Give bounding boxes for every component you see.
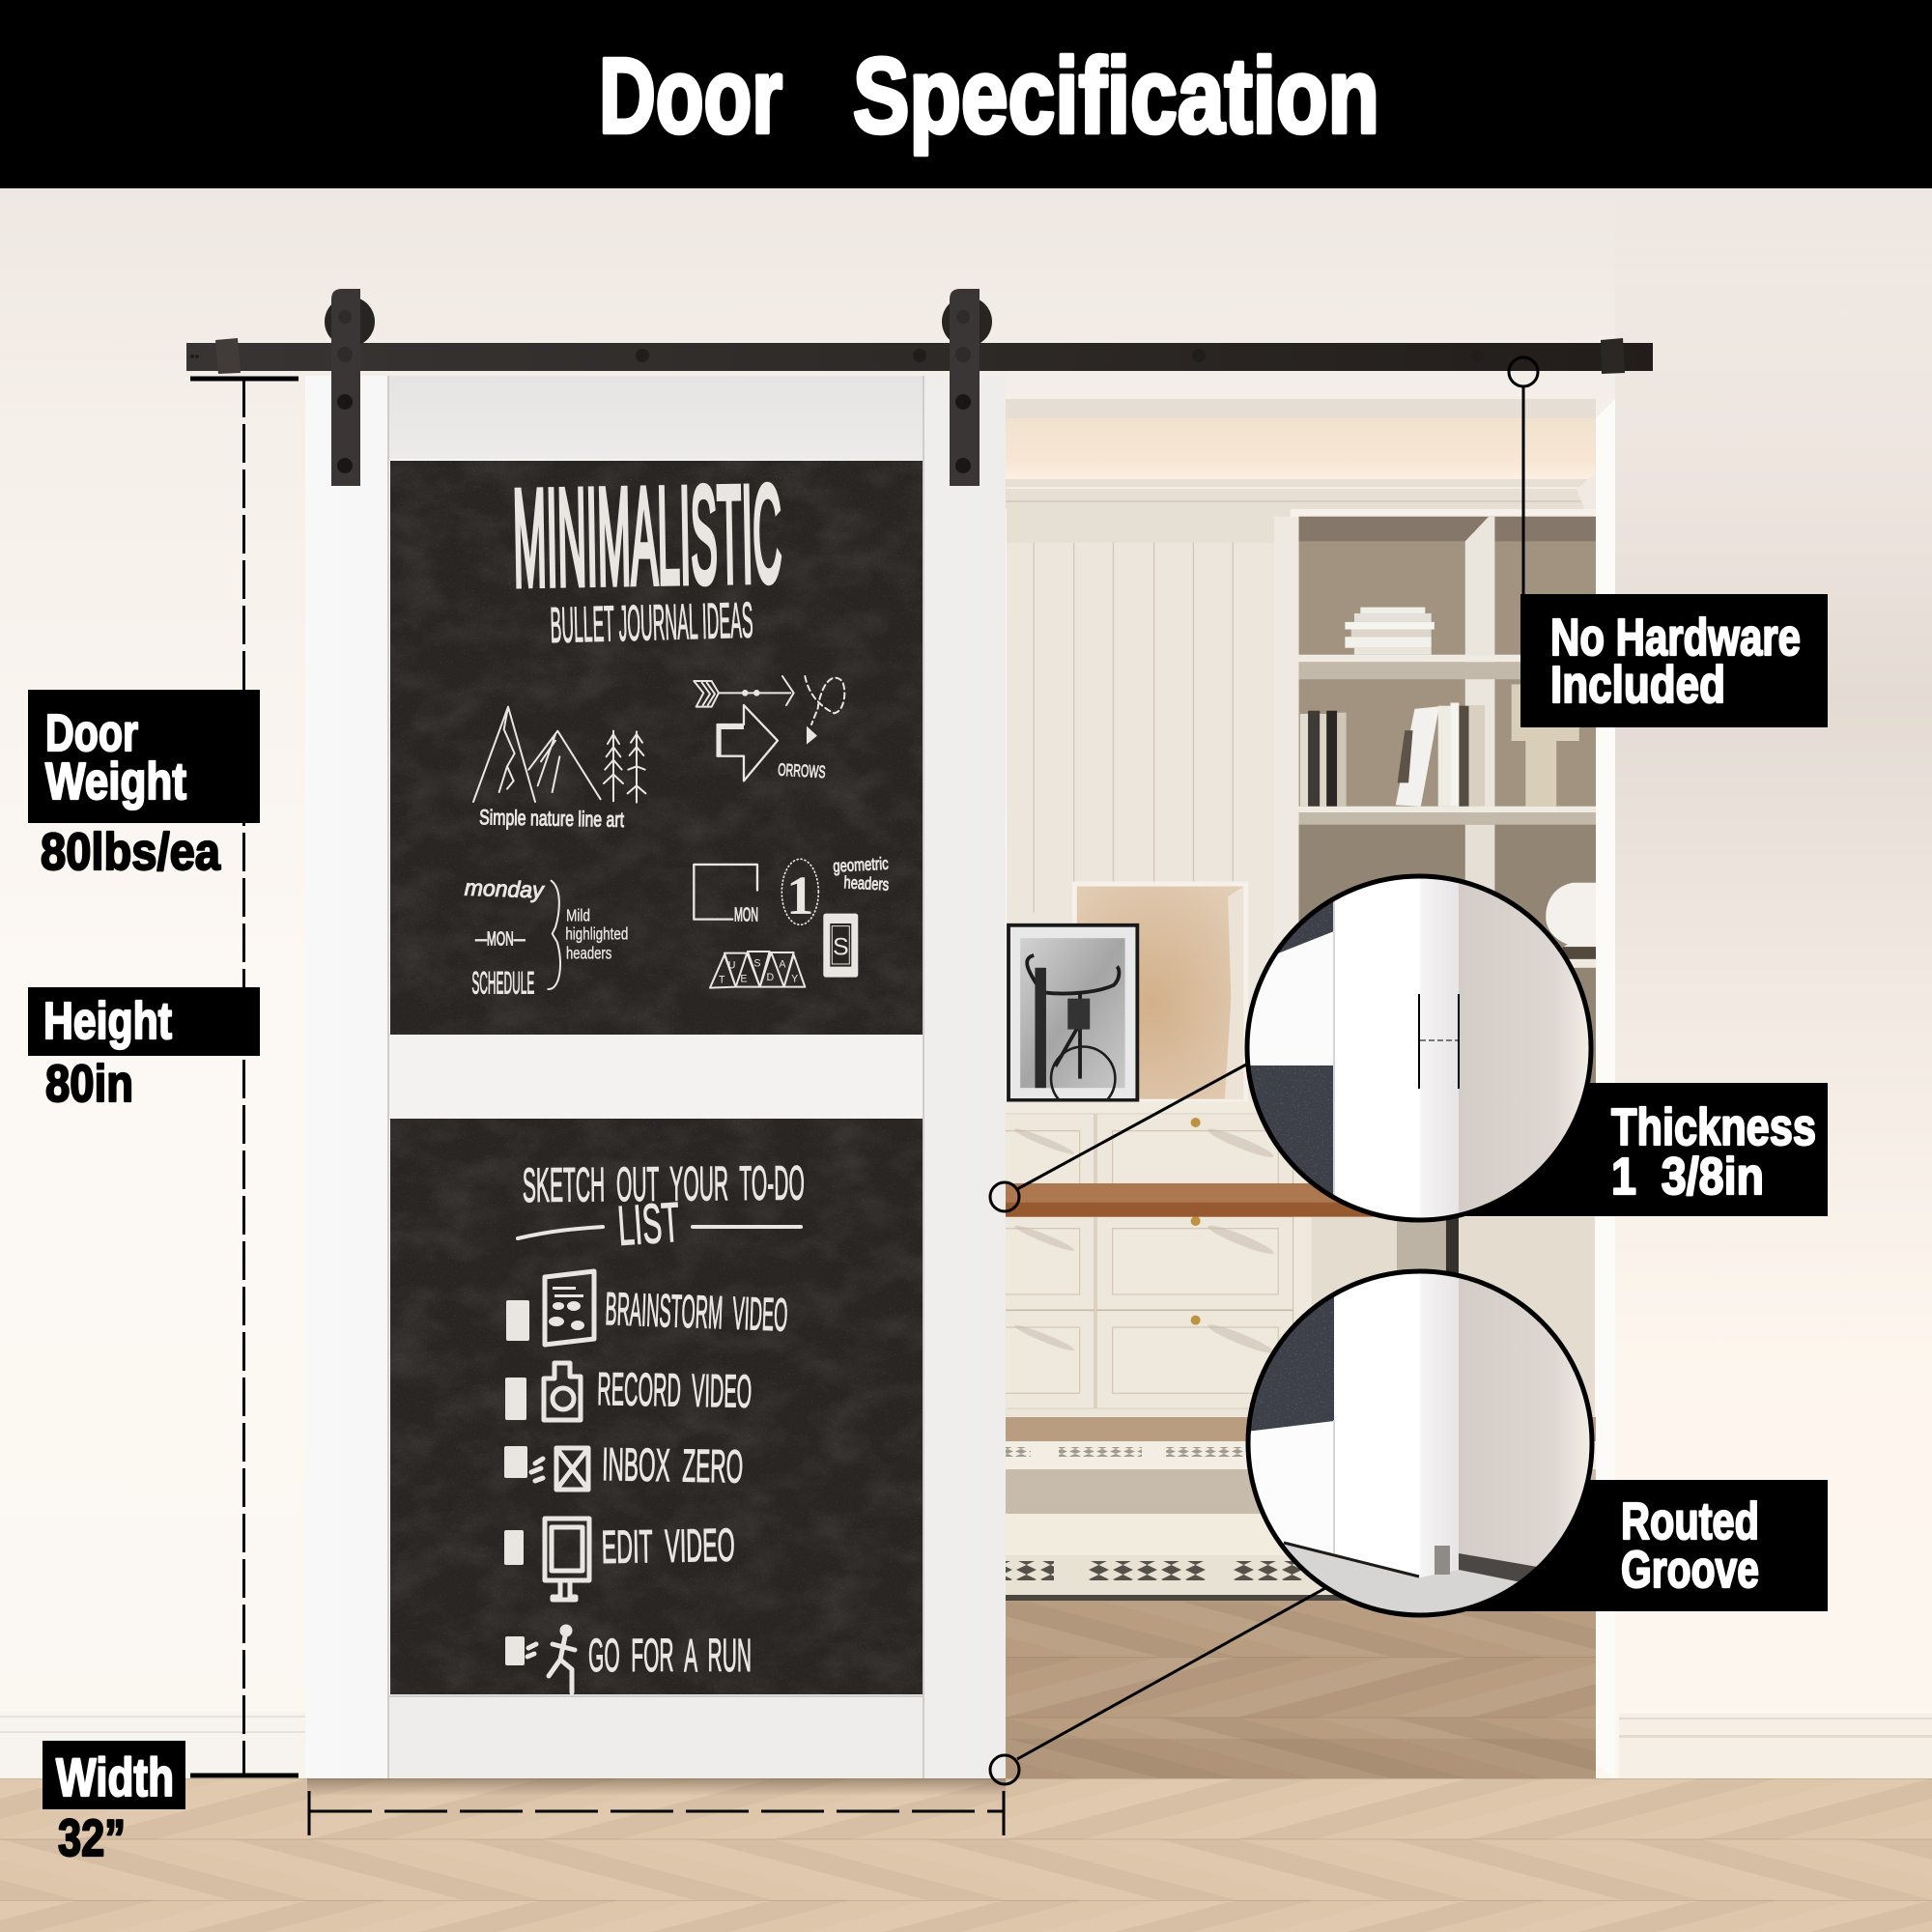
value: width: 32” [58,1809,126,1867]
door frame [305,376,1006,1778]
sketch: block arrow [717,705,778,781]
sketch: brace [548,881,560,989]
framed artwork [1007,881,1248,1111]
bookshelf [1274,517,1600,1133]
chalk note: mon: —MON— [475,927,526,950]
chalk note: mild headers: headers [566,944,611,963]
chalk heading: list: LIST [615,1191,682,1258]
height dimension line [190,379,298,1776]
to-do item: record video [505,1363,753,1420]
to-do item: brainstorm video [506,1271,788,1345]
sketch: arrow tip [807,726,817,745]
label: door weight: Door [45,704,138,762]
label: routed groove: Routed [1621,1492,1759,1550]
sketch: dashed arrow [805,676,844,724]
rail bolts [636,349,1485,362]
barn door: BULLET JOURNAL IDEAS [550,593,753,654]
to-do item: inbox zero [504,1439,744,1493]
label: no hardware included [1520,594,1828,727]
barn door: SKETCH OUT YOUR TO-DO [523,1155,805,1212]
detail circle: routed groove [1246,1269,1594,1623]
thickness marker [1419,994,1459,1089]
barn door: EDIT VIDEO [601,1520,735,1574]
chalk note: nature line art: Simple nature line art [479,805,624,832]
chalk note: geometric headers: headers [843,872,890,895]
right hanger [942,289,992,486]
sketch: tuesday bunting: Y [791,974,798,985]
width dimension line [309,1791,1004,1835]
sketch: box with mon [694,865,757,920]
right stop [1601,338,1625,374]
value: height: 80in [45,1055,133,1113]
title [599,37,1379,156]
label: thickness: 1 3/8in [1611,1148,1764,1206]
groove notch [1435,1546,1450,1575]
title: Specification [853,37,1379,156]
door jamb [1596,399,1615,1778]
value: door weight: 80lbs/ea [41,823,221,881]
vase [1546,883,1600,968]
chalk note: mild headers: Mild [566,905,590,924]
sketch: tuesday bunting: D [766,972,774,983]
chalkboard lower [389,1119,923,1695]
cabinets [1005,1102,1595,1546]
chalk sketches upper: SCHEDULE [471,964,534,1000]
label: no hardware included: No Hardware [1550,609,1801,667]
room seen through the doorway [1005,399,1600,1778]
sculpture [1512,684,1579,807]
sketch: tuesday bunting: T [719,974,725,985]
books: upright right [1396,702,1485,807]
label box: routed groove background [1459,1480,1828,1611]
room panel wall [1007,508,1291,1124]
sketch: tuesday bunting: A [779,959,786,971]
label: routed groove [1621,1492,1759,1599]
label: routed groove: Groove [1621,1541,1759,1599]
label box: thickness background [1459,1083,1828,1216]
label: door weight [28,690,260,823]
barn door: INBOX ZERO [602,1439,744,1493]
bicycle photo [1027,955,1119,1111]
barn door: MINIMALISTIC [512,457,782,615]
left stop [190,338,241,374]
callout connector: routed groove [990,1588,1325,1784]
callout connector: thickness [990,1065,1246,1211]
chalk note: mild headers: highlighted [565,924,628,944]
chalk note: mild headers [565,905,628,963]
room floor and rug [1006,1417,1596,1778]
chalk note: mon box: MON [734,903,758,925]
detail circle: thickness [1246,874,1594,1222]
left hanger [325,289,375,486]
chalk note: monday: monday [464,875,545,903]
label: height [28,987,260,1056]
sketch: numeral one [781,859,818,926]
barn door: BRAINSTORM VIDEO [605,1284,788,1342]
label: height: Height [43,992,172,1050]
to-do item: edit video [504,1519,735,1600]
sketch: arrow [694,676,794,707]
room upper wall and cove [1006,399,1596,509]
books: upright left [1300,711,1347,807]
sketch: tuesday bunting: U [728,960,735,972]
chalkboard upper [389,459,923,1036]
label: no hardware included: Included [1550,656,1725,714]
chalk sketches upper [464,676,890,1000]
chalk note: geometric headers [833,854,890,895]
barn door: GO FOR A RUN [588,1631,752,1682]
to-do item: go for a run [505,1627,752,1692]
rail [186,343,1653,371]
sketch: tuesday bunting: E [740,974,748,985]
brass knobs [1191,1118,1201,1325]
barn door hardware [186,289,1653,486]
label: width: Width [56,1747,174,1807]
books: stacked [1345,608,1435,655]
sketch: tuesday bunting [710,952,805,988]
sketch: s tile [823,914,858,978]
label: thickness: Thickness [1611,1098,1816,1156]
chalk note: arrows: ORROWS [778,760,826,781]
title bar [0,0,1932,188]
title: Door [599,37,782,156]
baseboards [0,1712,1932,1778]
barn door: RECORD VIDEO [597,1364,753,1418]
barn door [305,376,1006,1778]
chalk note: geometric headers: geometric [833,854,889,876]
sketch: tuesday bunting: S [753,958,761,970]
sketch: pine trees [604,731,645,803]
label: door weight: Weight [45,753,186,810]
front wood floor [0,1778,1932,1932]
sketch: s tile: S [833,933,849,960]
sketch: mountains [473,707,601,802]
callout connector: no hardware [1509,357,1538,594]
wood shelf [1006,1183,1392,1217]
door shadow on floor [307,1778,1006,1796]
chalk heading: list [518,1191,801,1258]
label: thickness [1611,1098,1816,1206]
sketch: numeral one: 1 [786,867,813,926]
